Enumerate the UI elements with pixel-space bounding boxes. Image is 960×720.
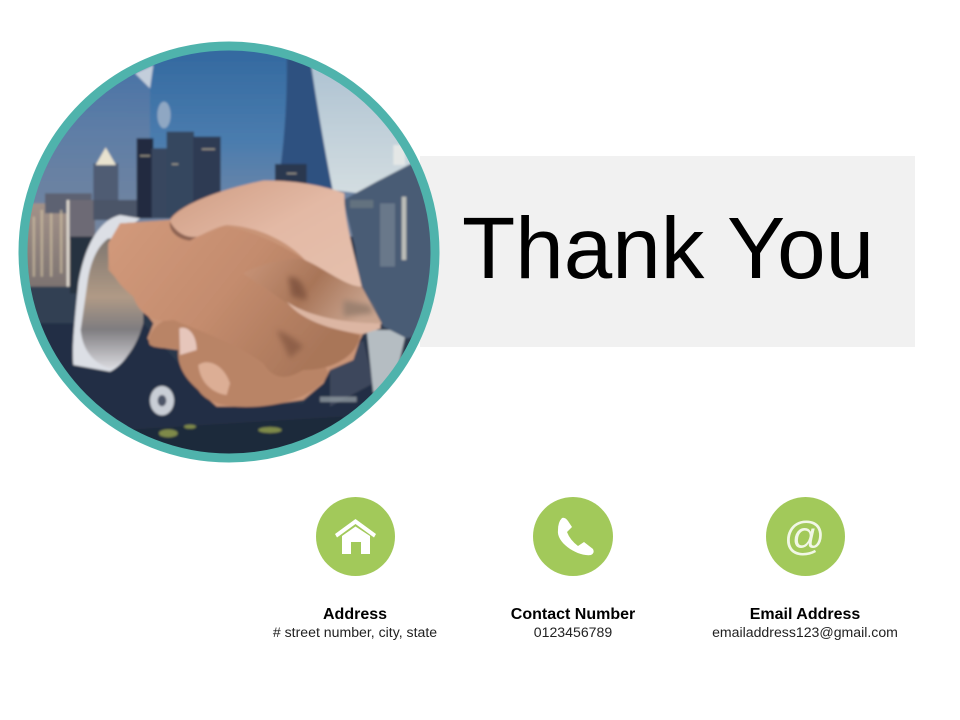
title: Thank You [462, 200, 874, 297]
photo: handshake in circular frame [18, 42, 440, 462]
icon: at sign: @ [784, 513, 825, 559]
photo: right sleeve [344, 163, 430, 339]
photo: city skyline [20, 132, 405, 333]
text: address label [272, 606, 437, 640]
icon: telephone [533, 497, 613, 576]
photo: clasped hands [108, 181, 382, 407]
photo ring [23, 46, 435, 458]
text: contact label [511, 606, 635, 640]
contact: phone [511, 497, 635, 640]
photo background: sky and suit [33, 50, 412, 406]
text: email label: emailaddress123@gmail.com [712, 624, 898, 640]
icon: at sign [766, 497, 845, 576]
photo: shirt cuff [73, 215, 143, 372]
photo: jacket lower [30, 323, 407, 463]
panel: thank you banner [420, 156, 915, 347]
icon: house [316, 497, 395, 576]
text: address label: # street number, city, state [273, 624, 437, 640]
text: contact label: Contact Number [511, 606, 635, 623]
text: address label: Address [323, 606, 387, 623]
text: email label [712, 606, 898, 640]
text: email label: Email Address [750, 606, 860, 623]
contact: email [712, 497, 898, 640]
contact: address [272, 497, 437, 640]
text: contact label: 0123456789 [534, 624, 612, 640]
